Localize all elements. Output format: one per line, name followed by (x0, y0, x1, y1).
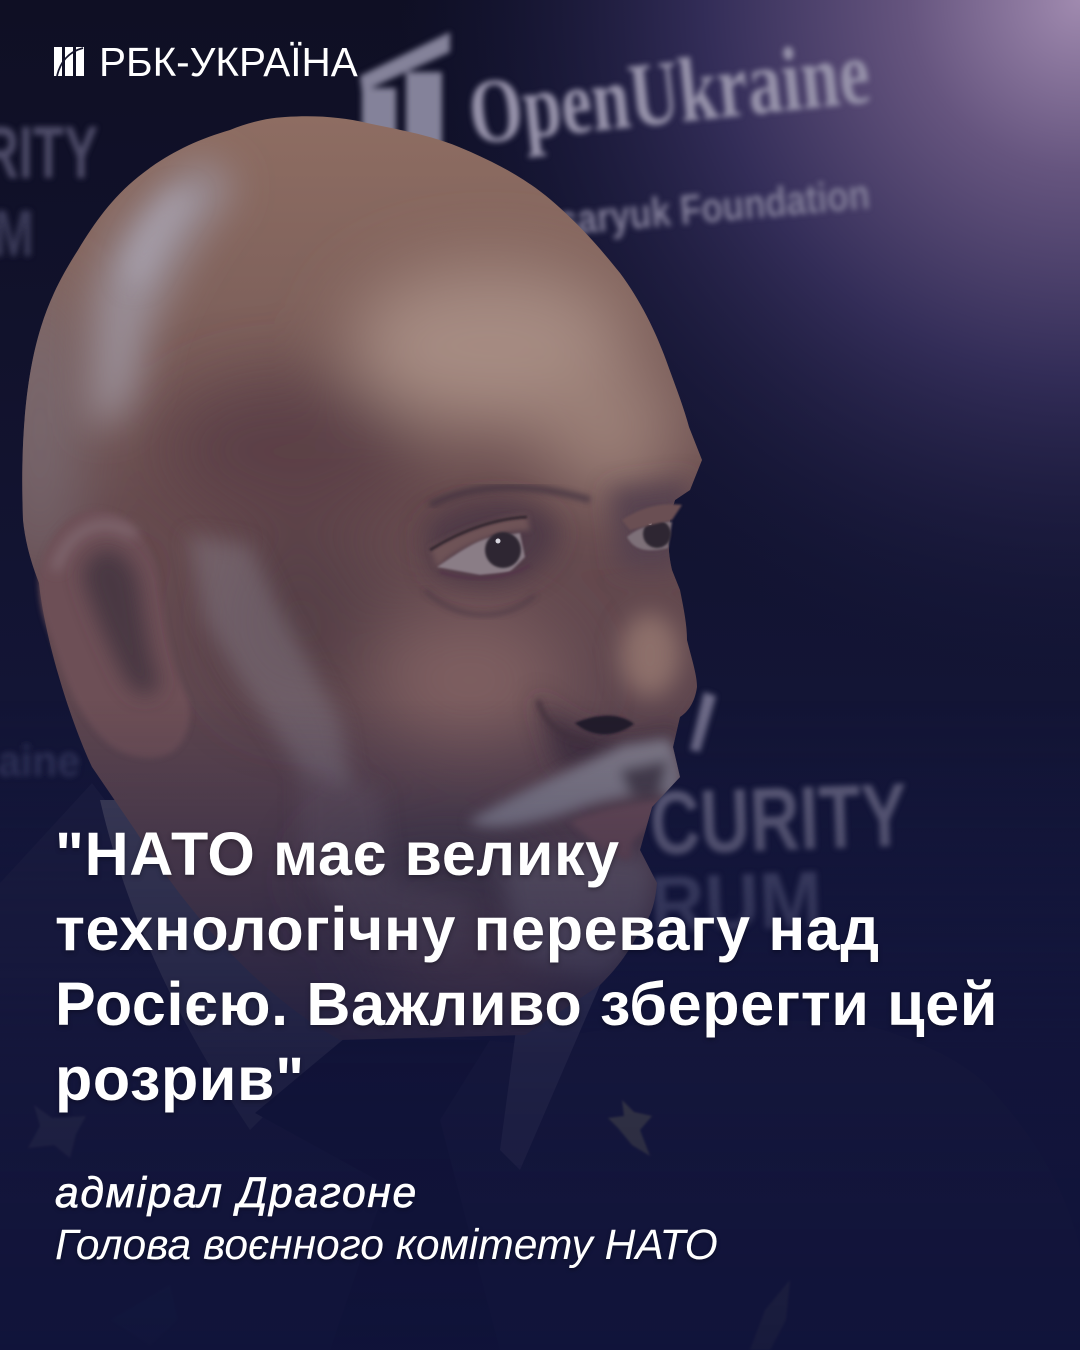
headline quote: Росією. Важливо зберегти цей (55, 970, 998, 1038)
blurred backdrop lettering: asaryuk Foundation (537, 170, 872, 246)
blurred backdrop lettering: OpenUkraine (464, 20, 874, 164)
logo icon (54, 47, 84, 76)
shirt collar (100, 800, 345, 1130)
blurred backdrop lettering: CURITY (648, 766, 909, 875)
blurred backdrop lettering: RUM (649, 855, 824, 950)
logo wordmark: РБК-УКРАЇНА (99, 39, 358, 85)
headline quote: технологічну перевагу над (55, 895, 880, 963)
tie (255, 1038, 500, 1350)
blurred backdrop lettering (0, 20, 909, 950)
sideburn and beard (188, 535, 653, 980)
headline quote: розрив" (55, 1045, 305, 1113)
headline quote: "НАТО має велику (55, 820, 620, 888)
lower darkening overlay (0, 700, 1080, 1350)
attribution: адмірал Драгоне (55, 1169, 418, 1217)
attribution: Голова воєнного комітету НАТО (55, 1221, 718, 1269)
eyes, brows, nostril (425, 488, 682, 742)
headline quote (55, 820, 998, 1114)
logo: РБК-Україна (22, 39, 697, 762)
skin lighting (10, 265, 680, 1010)
jacket (0, 783, 1080, 1350)
neck and head (0, 100, 720, 1060)
attribution (55, 1169, 718, 1270)
ear (39, 510, 190, 758)
shoulder insignia (28, 1100, 790, 1350)
blurred backdrop lettering: aine (0, 737, 80, 786)
